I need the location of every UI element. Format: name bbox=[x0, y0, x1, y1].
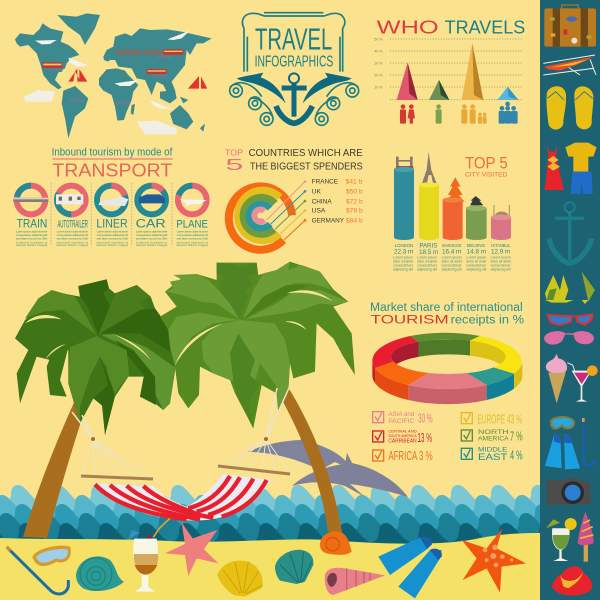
icon: bikini lower part bbox=[545, 300, 588, 304]
city labels: 14.8 m bbox=[467, 248, 486, 255]
body copy: Lorem ipsum dolor sit amet bbox=[16, 229, 47, 233]
concentric ring chart bbox=[229, 186, 292, 250]
panel: transport bbox=[13, 147, 208, 247]
legend: 7 % bbox=[510, 429, 523, 443]
city labels: LONDON bbox=[395, 243, 413, 248]
city body copy: dolor sit amet bbox=[491, 259, 511, 263]
people icons bbox=[400, 102, 518, 124]
palm trunks bbox=[23, 361, 342, 538]
axis: 20 % bbox=[374, 74, 383, 78]
country labels bbox=[312, 178, 345, 224]
icon: flippers bbox=[378, 537, 442, 598]
city body copy: adipiscing elit bbox=[417, 267, 437, 271]
body copy bbox=[16, 229, 208, 247]
legend: 4 % bbox=[510, 448, 523, 462]
city labels: 18.5 m bbox=[419, 249, 438, 256]
city labels: BEIJING bbox=[467, 243, 486, 248]
donut: liner bbox=[97, 186, 128, 214]
icon: green shell bbox=[76, 556, 124, 591]
body copy: sed diam nonummy nibh bbox=[177, 237, 208, 241]
body copy: sed diam nonummy nibh bbox=[57, 237, 88, 241]
body copy: laoreet dolore magna bbox=[97, 243, 128, 247]
anchor bbox=[276, 73, 312, 123]
body copy: Lorem ipsum dolor sit amet bbox=[136, 229, 167, 233]
body copy: Lorem ipsum dolor sit amet bbox=[97, 229, 128, 233]
dolphins bbox=[248, 433, 408, 497]
axis bbox=[374, 38, 523, 100]
city labels: ISTANBUL bbox=[491, 243, 511, 248]
icon: anchor bbox=[549, 202, 592, 263]
body copy: laoreet dolore magna bbox=[16, 243, 48, 247]
body copy: consectetuer adipiscing elit bbox=[177, 233, 208, 237]
separators bbox=[51, 183, 172, 247]
spirals bbox=[230, 83, 359, 125]
legend: EAST bbox=[478, 452, 508, 462]
icon: conch shell bbox=[325, 568, 385, 595]
spend values: $84 b bbox=[346, 217, 363, 224]
icon: fins bbox=[545, 434, 580, 469]
donut: plane bbox=[178, 186, 207, 214]
ropes bbox=[72, 388, 290, 479]
country labels: CHINA bbox=[312, 198, 332, 205]
frame bbox=[242, 13, 345, 72]
body copy: sed diam nonummy nibh bbox=[136, 237, 168, 241]
continents bbox=[15, 13, 212, 138]
mode labels: LINER bbox=[96, 216, 128, 230]
icon: bikini bbox=[545, 272, 595, 302]
city body copy: Lorem ipsum bbox=[466, 255, 487, 259]
icon: pink starfish bbox=[165, 523, 218, 576]
heading: THE BIGGEST SPENDERS bbox=[250, 162, 363, 173]
axis: 40 % bbox=[374, 50, 383, 54]
icon: ice cream bbox=[546, 354, 567, 403]
heading bbox=[370, 300, 524, 326]
panel: market share bbox=[370, 300, 524, 463]
body copy: consectetuer adipiscing elit bbox=[57, 233, 88, 237]
frond highlights bbox=[175, 290, 333, 365]
dolphins bbox=[237, 73, 352, 103]
icon: shorts bbox=[571, 172, 593, 194]
legend bbox=[373, 411, 523, 463]
body copy: euismod tincidunt ut bbox=[136, 240, 167, 244]
legend: AMERICA bbox=[478, 435, 509, 442]
icon: cocktail glass bbox=[128, 518, 170, 592]
city labels: 16.4 m bbox=[442, 248, 461, 255]
icon: orange starfish bbox=[462, 528, 526, 593]
spend values: $50 b bbox=[346, 188, 363, 195]
icon: mask bbox=[550, 416, 575, 430]
inner wall bbox=[391, 340, 506, 374]
body copy: sed diam nonummy nibh bbox=[97, 237, 128, 241]
legend: 13 % bbox=[417, 431, 432, 445]
icon: snorkel bbox=[583, 418, 595, 466]
city body copy: adipiscing elit bbox=[393, 267, 413, 271]
city body copy: Lorem ipsum bbox=[393, 255, 413, 259]
axis: 50 % bbox=[374, 38, 383, 42]
icon: orange shell bbox=[320, 531, 352, 555]
country labels: UK bbox=[312, 188, 321, 195]
heading: TRAVELS bbox=[445, 16, 525, 37]
top faces bbox=[410, 333, 480, 342]
city body copy: consectetuer bbox=[491, 263, 512, 267]
legend: 30 % bbox=[418, 411, 433, 425]
leader lines bbox=[267, 180, 306, 240]
sea waves bbox=[0, 484, 540, 582]
mode labels: CAR bbox=[136, 216, 166, 230]
legend: CENTRAL AND bbox=[388, 430, 417, 434]
heading: TOURISM bbox=[371, 313, 449, 326]
heading bbox=[52, 147, 173, 181]
icon: yellow scallop bbox=[217, 561, 263, 597]
cylinders bbox=[394, 167, 511, 240]
palm tree right bbox=[160, 262, 355, 428]
icon: swimsuit bbox=[545, 145, 564, 190]
heading: WHO bbox=[377, 16, 439, 37]
heading: TOP 5 bbox=[465, 153, 508, 172]
logo text bbox=[255, 22, 333, 71]
city labels: 12.9 m bbox=[491, 248, 510, 255]
logo text: INFOGRAPHICS bbox=[255, 54, 333, 71]
city body copy bbox=[393, 255, 512, 271]
logo: Travel Infographics bbox=[230, 13, 359, 125]
icon: snorkel bbox=[7, 547, 68, 594]
axis: 10 % bbox=[374, 86, 383, 90]
beach items bbox=[7, 518, 263, 597]
body copy: consectetuer adipiscing elit bbox=[136, 233, 167, 237]
city body copy: dolor sit amet bbox=[393, 259, 413, 263]
icon: pink cocktail bbox=[567, 363, 598, 402]
body copy: laoreet dolore magna bbox=[57, 243, 88, 247]
heading: receipts in % bbox=[451, 312, 524, 326]
heading: TOP bbox=[225, 147, 243, 157]
axis: 30 % bbox=[374, 62, 383, 66]
city body copy: dolor sit amet bbox=[442, 259, 462, 263]
city body copy: dolor sit amet bbox=[417, 259, 437, 263]
legend: AFRICA 3 % bbox=[388, 449, 433, 463]
donut: car bbox=[137, 186, 166, 214]
heading: COUNTRIES WHICH ARE bbox=[249, 148, 363, 159]
spend values: $79 b bbox=[346, 208, 363, 215]
sand bbox=[0, 533, 540, 600]
icon: camera bbox=[546, 478, 591, 505]
city body copy: adipiscing elit bbox=[466, 267, 486, 271]
icon: flip flops bbox=[546, 86, 593, 130]
body copy: laoreet dolore magna bbox=[136, 243, 168, 247]
city body copy: consectetuer bbox=[442, 263, 463, 267]
city body copy: consectetuer bbox=[466, 263, 487, 267]
pyramids bbox=[397, 43, 518, 100]
icon: t-shirt bbox=[565, 143, 597, 172]
palm tree left bbox=[15, 279, 176, 435]
legend: CARRIBEAN bbox=[388, 438, 417, 444]
mode labels bbox=[17, 216, 208, 230]
country labels: USA bbox=[312, 208, 326, 215]
body copy: consectetuer adipiscing elit bbox=[16, 233, 47, 237]
chart: top 5 city visited bbox=[393, 152, 512, 271]
body copy: laoreet dolore magna bbox=[177, 243, 208, 247]
3D ring chart bbox=[372, 333, 522, 404]
legend: NORTH bbox=[478, 429, 509, 436]
city body copy: adipiscing elit bbox=[442, 267, 462, 271]
icon: pink sunglasses bbox=[544, 331, 594, 345]
city body copy: Lorem ipsum bbox=[442, 255, 462, 259]
legend: ASIA and bbox=[388, 412, 414, 418]
city labels bbox=[394, 243, 511, 256]
city body copy: Lorem ipsum bbox=[417, 255, 437, 259]
city body copy: adipiscing elit bbox=[491, 267, 511, 271]
donut: autotrailer bbox=[56, 186, 86, 214]
icon: diving mask bbox=[32, 546, 71, 566]
city body copy: consectetuer bbox=[417, 263, 438, 267]
city body copy: dolor sit amet bbox=[466, 259, 486, 263]
body copy: Lorem ipsum dolor sit amet bbox=[57, 229, 88, 233]
body copy: Lorem ipsum dolor sit amet bbox=[177, 229, 208, 233]
legend: PACIFIC bbox=[388, 419, 415, 425]
mode labels: TRAIN bbox=[17, 216, 47, 230]
planes, buses, boats, ships bbox=[24, 31, 207, 134]
logo text: TRAVEL bbox=[255, 22, 332, 56]
icon: red sunglasses bbox=[546, 313, 593, 326]
heading: 5 bbox=[225, 157, 244, 174]
body copy: euismod tincidunt ut bbox=[16, 240, 47, 244]
mode labels: AUTOTRAILER bbox=[57, 218, 88, 230]
frond highlights bbox=[25, 315, 151, 360]
legend: SOUTH AMERICA bbox=[388, 434, 417, 438]
donut: train bbox=[13, 186, 48, 214]
heading: CITY VISITED bbox=[465, 172, 508, 178]
body copy: sed diam nonummy nibh bbox=[16, 237, 48, 241]
heading bbox=[377, 16, 525, 37]
body copy: euismod tincidunt ut bbox=[177, 240, 208, 244]
icon: popsicle bbox=[578, 512, 594, 562]
body copy: euismod tincidunt ut bbox=[57, 240, 88, 244]
legend: MIDDLE bbox=[478, 447, 507, 454]
icon: suitcase bbox=[544, 5, 596, 47]
icon: lounger bbox=[543, 55, 596, 75]
world map with transport icons bbox=[15, 13, 212, 138]
country labels: FRANCE bbox=[312, 178, 339, 185]
city labels: 22.3 m bbox=[394, 248, 413, 255]
spend values: $72 b bbox=[346, 198, 363, 205]
outer wall bbox=[372, 361, 522, 404]
country labels: GERMANY bbox=[312, 217, 345, 224]
spend values bbox=[346, 178, 363, 224]
icon: sun hat bbox=[552, 566, 592, 596]
panel: biggest spenders bbox=[225, 147, 363, 250]
chart: who travels bbox=[374, 16, 525, 124]
body copy: consectetuer adipiscing elit bbox=[97, 233, 128, 237]
panel: sidebar of travel icons bbox=[540, 0, 600, 600]
city labels: PARIS bbox=[419, 243, 437, 250]
spend values: $41 b bbox=[346, 178, 363, 185]
spreader bars bbox=[81, 466, 290, 479]
city body copy: consectetuer bbox=[393, 263, 414, 267]
heading: Market share of international bbox=[370, 300, 523, 314]
heading: TRANSPORT bbox=[52, 160, 172, 181]
icon: teal scallop bbox=[275, 550, 313, 584]
legend: EUROPE 43 % bbox=[477, 412, 522, 426]
mode labels: PLANE bbox=[176, 218, 208, 230]
body copy: euismod tincidunt ut bbox=[97, 240, 128, 244]
landmarks bbox=[396, 152, 509, 217]
heading: Inbound tourism by mode of bbox=[52, 147, 173, 159]
hammock bbox=[72, 388, 290, 521]
heading bbox=[225, 147, 363, 174]
city body copy: Lorem ipsum bbox=[491, 255, 511, 259]
fabric bbox=[92, 474, 272, 521]
sidebar background bbox=[540, 0, 600, 600]
icon: green cocktail bbox=[546, 518, 577, 561]
city labels: BANGKOK bbox=[442, 243, 462, 248]
